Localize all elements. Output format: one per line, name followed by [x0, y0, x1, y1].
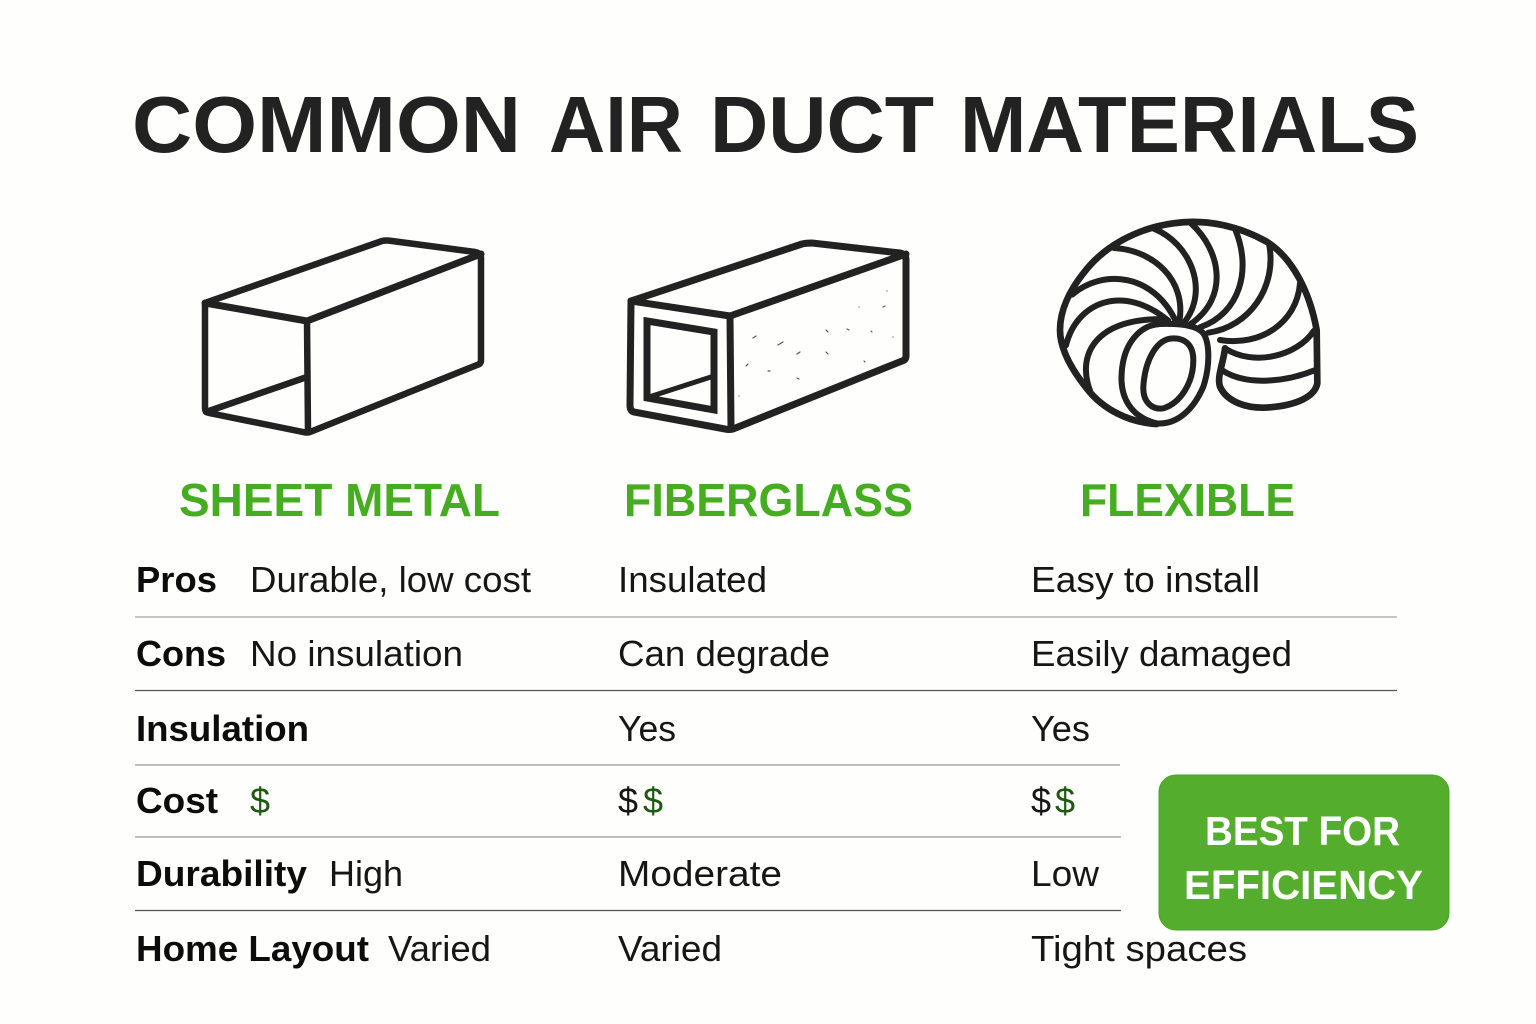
icon: sheet metal duct — [205, 240, 481, 432]
row: durability: Durability — [136, 853, 307, 894]
row: durability — [136, 853, 1100, 894]
row: pros: Easy to install — [1031, 559, 1260, 600]
row: cost — [136, 780, 1075, 821]
title: DUCT — [710, 80, 934, 169]
row: cost: $ — [1031, 780, 1051, 821]
row: pros: Durable, low cost — [250, 559, 531, 600]
title — [132, 80, 1419, 169]
row: insulation: Yes — [618, 708, 676, 749]
row: cons: Easily damaged — [1031, 633, 1292, 674]
callout: best for efficiency: BEST FOR — [1205, 808, 1400, 854]
title: MATERIALS — [960, 80, 1419, 169]
row: cost: $ — [1055, 780, 1075, 821]
row: cost: $ — [250, 780, 270, 821]
row: insulation: Yes — [1031, 708, 1090, 749]
row: home layout: Home Layout — [136, 928, 369, 969]
icon: flexible duct — [1060, 222, 1317, 424]
row: cons: No insulation — [250, 633, 463, 674]
row: home layout: Varied — [618, 928, 722, 969]
row: home layout: Varied — [388, 928, 491, 969]
row: cons: Can degrade — [618, 633, 830, 674]
row: durability: High — [329, 853, 403, 894]
row: insulation: Insulation — [136, 708, 309, 749]
row: cost: Cost — [136, 780, 218, 821]
icon: fiberglass duct — [630, 243, 906, 430]
title: COMMON — [132, 80, 521, 169]
row: cost: $ — [618, 780, 638, 821]
row: cons: Cons — [136, 633, 226, 674]
heading: sheet metal: SHEET METAL — [179, 474, 500, 526]
row: pros — [136, 559, 1260, 600]
row: pros: Pros — [136, 559, 217, 600]
row: home layout — [136, 928, 1247, 969]
title: AIR — [549, 80, 683, 169]
row: insulation — [136, 708, 1090, 749]
callout: best for efficiency: EFFICIENCY — [1184, 862, 1423, 908]
fiberglass speckles — [739, 291, 893, 396]
row: cost: $ — [643, 780, 663, 821]
row: durability: Moderate — [618, 853, 782, 894]
heading: fiberglass: FIBERGLASS — [624, 474, 913, 526]
row: cons — [136, 633, 1292, 674]
callout: best for efficiency — [1159, 775, 1449, 930]
row: pros: Insulated — [618, 559, 767, 600]
row: home layout: Tight spaces — [1031, 928, 1247, 969]
heading: flexible: FLEXIBLE — [1080, 474, 1295, 526]
row: durability: Low — [1031, 853, 1100, 894]
